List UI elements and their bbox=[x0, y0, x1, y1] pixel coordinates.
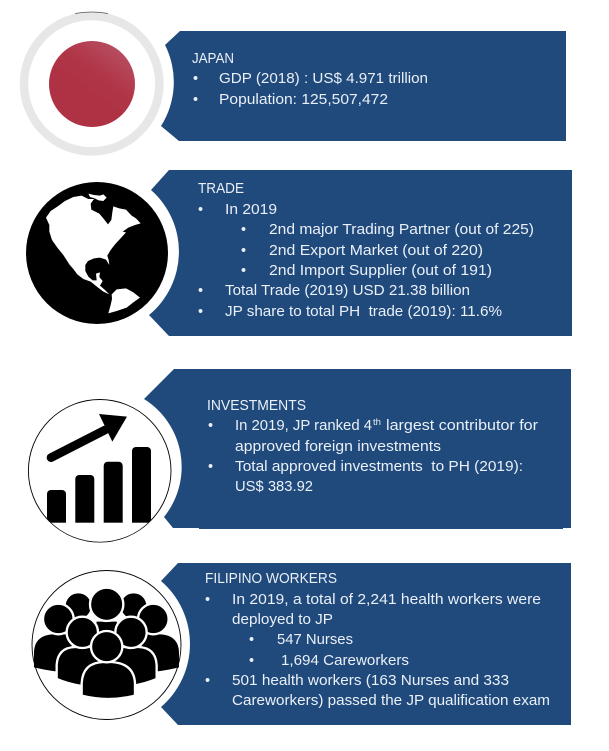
text block: Trade facts: • bbox=[241, 222, 246, 238]
text block: Investments facts: • bbox=[208, 418, 213, 434]
text block: Trade facts: 2nd Export Market (out of 220) bbox=[269, 243, 483, 259]
panel: Japan bbox=[161, 31, 566, 141]
panel: Trade bbox=[149, 170, 572, 336]
panel: Investments bbox=[144, 369, 571, 529]
text block: Filipino workers facts: • bbox=[205, 673, 210, 689]
icon: group of people bbox=[32, 570, 181, 720]
text block: Filipino workers facts: Careworkers) passed the JP qualification exam bbox=[232, 693, 550, 709]
text block: Investments facts: th bbox=[373, 417, 381, 427]
text block: Trade facts: In 2019 bbox=[225, 202, 277, 218]
heading: Filipino workers: FILIPINO WORKERS bbox=[205, 571, 337, 587]
text block: Japan facts: • bbox=[193, 92, 198, 108]
text block: Investments facts: Total approved investments to PH (2019): bbox=[235, 459, 523, 475]
text block: Filipino workers facts bbox=[205, 592, 550, 709]
text block: Investments facts bbox=[208, 417, 538, 495]
text block: Filipino workers facts: deployed to JP bbox=[232, 612, 333, 628]
text block: Investments facts: approved foreign investments bbox=[235, 439, 441, 455]
panel background: Investments bbox=[144, 369, 571, 529]
icon: growth chart bbox=[28, 399, 172, 542]
text block: Filipino workers facts: 1,694 Careworkers bbox=[281, 653, 409, 669]
panel background: Japan bbox=[161, 31, 566, 141]
panel: Filipino workers bbox=[161, 563, 571, 725]
panel background: Trade bbox=[149, 170, 572, 336]
text block: Trade facts: 2nd major Trading Partner (out of 225) bbox=[269, 222, 534, 238]
icon: globe bbox=[26, 182, 168, 324]
panel background: Filipino workers bbox=[161, 563, 571, 725]
icon: Japan flag circle bbox=[24, 12, 159, 151]
text block: Japan facts: • bbox=[193, 71, 198, 87]
text block: Investments facts: US$ 383.92 bbox=[235, 479, 313, 495]
text block: Japan facts bbox=[193, 71, 428, 108]
text block: Investments facts: largest contributor for bbox=[386, 418, 538, 434]
text block: Filipino workers facts: • bbox=[249, 653, 254, 669]
text block: Investments facts: • bbox=[208, 459, 213, 475]
heading: Japan: JAPAN bbox=[192, 51, 234, 67]
text block: Trade facts: • bbox=[198, 202, 203, 218]
text block: Trade facts: 2nd Import Supplier (out of 191) bbox=[269, 263, 492, 279]
text block: Filipino workers facts: In 2019, a total of 2,241 health workers were bbox=[232, 592, 541, 608]
text block: Filipino workers facts: • bbox=[249, 632, 254, 648]
bars bbox=[47, 447, 151, 542]
text block: Trade facts: • bbox=[241, 263, 246, 279]
text block: Trade facts bbox=[198, 202, 534, 320]
text block: Japan facts: Population: 125,507,472 bbox=[219, 92, 388, 108]
text block: Trade facts: Total Trade (2019) USD 21.38 billion bbox=[225, 283, 470, 299]
text block: Trade facts: • bbox=[198, 304, 203, 320]
heading: Trade: TRADE bbox=[198, 181, 244, 197]
text block: Trade facts: • bbox=[241, 243, 246, 259]
text block: Japan facts: GDP (2018) : US$ 4.971 trillion bbox=[219, 71, 428, 87]
text block: Filipino workers facts: 501 health workers (163 Nurses and 333 bbox=[232, 673, 509, 689]
text block: Trade facts: • bbox=[198, 283, 203, 299]
arrow bbox=[51, 414, 127, 458]
text block: Filipino workers facts: 547 Nurses bbox=[277, 632, 353, 648]
heading: Investments: INVESTMENTS bbox=[207, 398, 306, 414]
text block: Trade facts: JP share to total PH trade (2019): 11.6% bbox=[225, 304, 502, 320]
text block: Filipino workers facts: • bbox=[205, 592, 210, 608]
text block: Investments facts: In 2019, JP ranked 4 bbox=[235, 418, 372, 434]
